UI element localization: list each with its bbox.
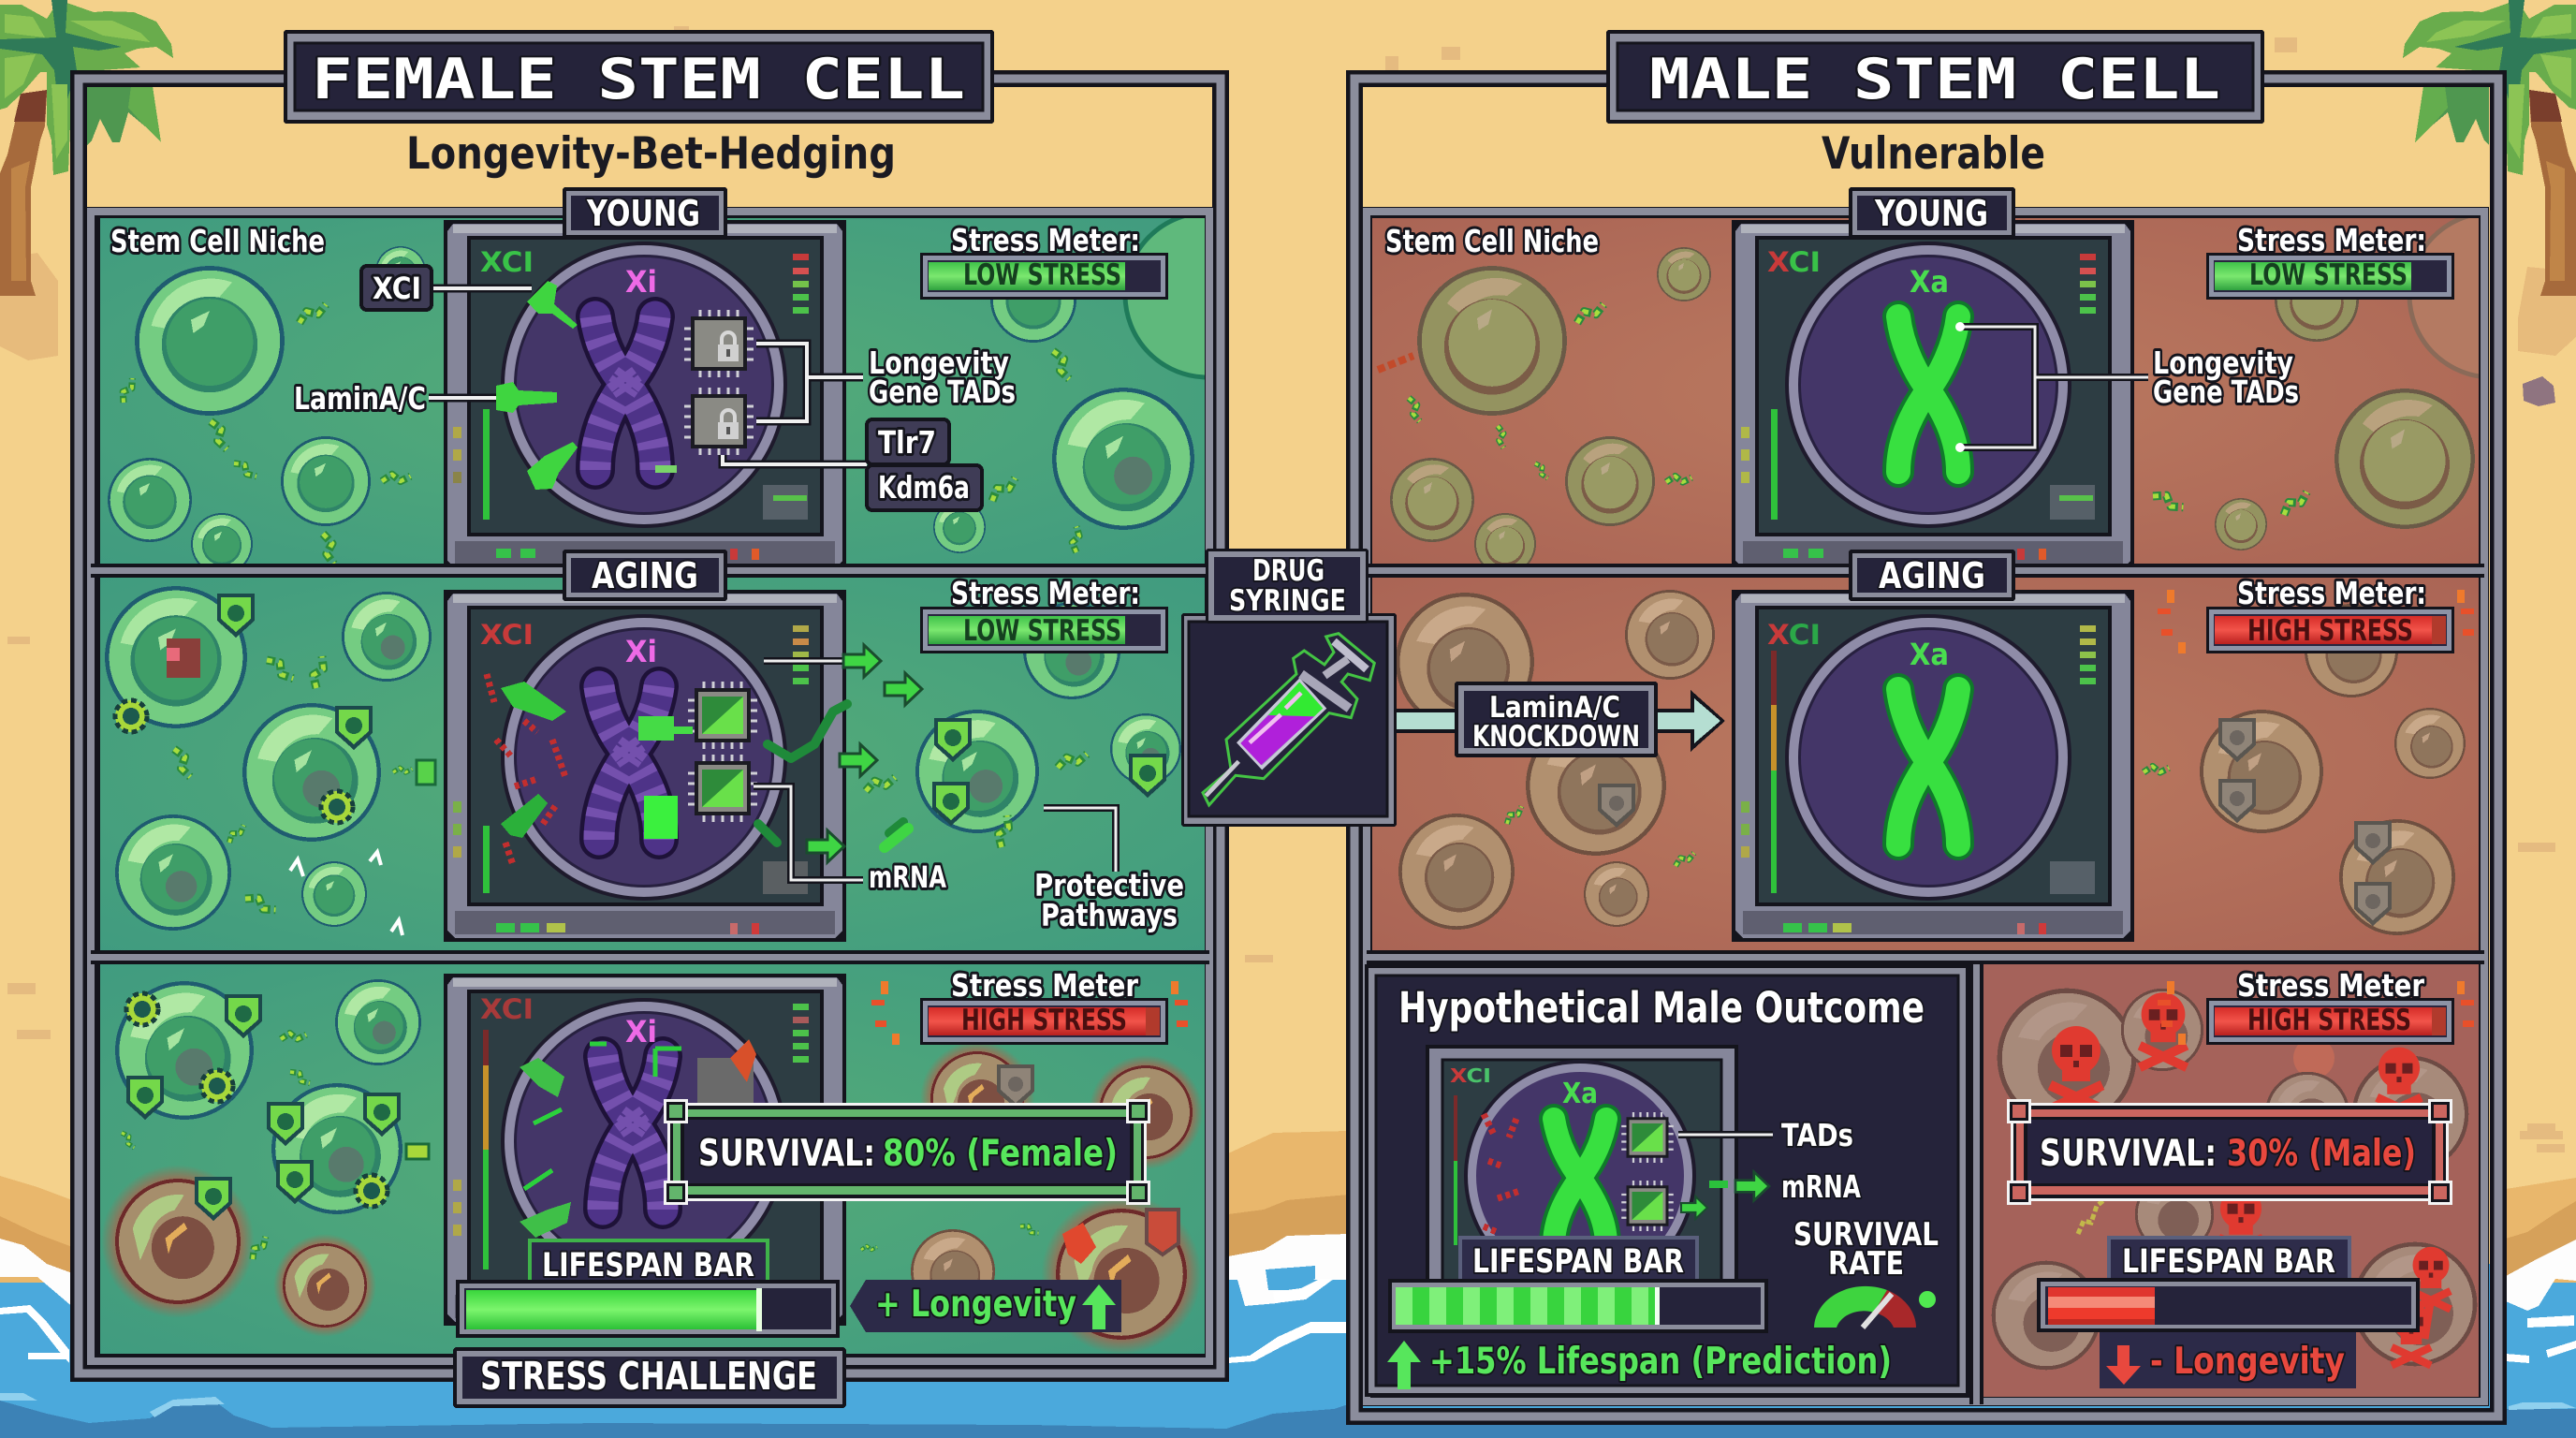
label: young male: YOUNG <box>1874 193 1988 234</box>
XCI screen label: XCI <box>480 246 534 278</box>
Xi label: Xi <box>625 264 657 300</box>
label: aging male <box>1849 550 2015 601</box>
stress meter: female aging low <box>920 575 1168 653</box>
panel: male young niche <box>1378 213 2574 575</box>
icon: syringe <box>1203 634 1374 805</box>
tags: Tlr7 and Kdm6a <box>723 419 982 510</box>
right shore <box>2506 1178 2576 1283</box>
arrow: LaminA/C knockdown from syringe to male panel: LaminA/C <box>1489 691 1620 725</box>
stress meter: male aging high: Stress Meter: <box>2237 575 2426 611</box>
panel: female stress challenge <box>101 979 1203 1354</box>
dying cells <box>1994 990 2475 1368</box>
label: young female <box>563 187 727 239</box>
monitor: female aging <box>444 590 846 942</box>
callout: longevity gene TADs male: Gene TADs <box>2153 374 2299 410</box>
bar: hypothetical lifespan <box>1388 1279 1768 1333</box>
gene chips open <box>688 682 757 749</box>
title: male stem cell: MALE STEM CELL <box>1649 47 2220 112</box>
bar: female lifespan <box>456 1280 840 1338</box>
stress meter: female stress high: HIGH STRESS <box>961 1004 1127 1037</box>
dark panel frame <box>1365 964 1983 1404</box>
panel: male stem cell <box>1354 30 2574 1416</box>
stress meter: female stress high <box>871 967 1188 1045</box>
monitor lights <box>453 254 809 560</box>
title: male stem cell <box>1606 30 2264 124</box>
female outer frame <box>79 79 1221 1373</box>
callout: survival 30% male: 30% (Male) <box>2227 1133 2416 1175</box>
icon: right palm tree <box>2403 0 2576 296</box>
title: female stem cell: FEMALE STEM CELL <box>312 47 965 112</box>
panel: hypothetical male outcome <box>1365 964 1983 1404</box>
green lamin clamps <box>496 281 677 490</box>
subtitle: Vulnerable: Vulnerable <box>1822 128 2045 180</box>
monitor: male young <box>1732 220 2134 572</box>
label: lifespan bar heading male: LIFESPAN BAR <box>2122 1243 2335 1281</box>
green reactivated region <box>638 716 693 839</box>
panel: female young niche <box>108 213 1290 575</box>
label: LaminA/C with pointer: LaminA/C <box>294 380 426 417</box>
middle shore <box>1228 1131 1348 1259</box>
stem cells male young <box>1378 213 2574 575</box>
chromosome: inactive X under stress <box>603 1056 663 1210</box>
label: lifespan bar heading hypothetical: LIFESPAN BAR <box>1472 1243 1684 1281</box>
stress meter: female stress high: Stress Meter <box>951 967 1139 1004</box>
callout: Longevity Gene TADs with bracket: Longevity <box>869 345 1009 381</box>
XCI mini label: XCI <box>1450 1064 1491 1087</box>
gene chips locked <box>684 310 754 377</box>
stress meter: male aging high <box>2158 575 2474 653</box>
aging monitor lights <box>453 625 809 934</box>
callout: longevity gene TADs male <box>1955 322 2299 452</box>
gauge: survival rate <box>1814 1286 1936 1328</box>
callout: Protective Pathways <box>1034 808 1184 933</box>
label: stress challenge <box>453 1347 846 1408</box>
arrow and prediction: +15% lifespan <box>1387 1341 1892 1389</box>
monitor: female stress <box>444 974 846 1326</box>
label: young male <box>1849 187 2015 239</box>
callout: survival 80% female: SURVIVAL: <box>698 1133 875 1175</box>
stress meter: female young low <box>920 222 1168 300</box>
debris mini <box>1454 1095 1520 1245</box>
callout: Protective Pathways: Pathways <box>1041 897 1178 933</box>
stem cells young <box>108 213 1290 575</box>
male inner panel backgrounds <box>1367 212 2484 1401</box>
stem cells aging with shields <box>105 586 1181 935</box>
label: survival rate <box>1793 1216 1939 1283</box>
monitor: female young <box>444 220 846 572</box>
label: survival rate: SURVIVAL <box>1793 1216 1939 1254</box>
chromosome: inactive X aging with escaping regions <box>599 686 659 840</box>
panel: drug syringe <box>1181 549 1397 827</box>
Xi stress label: Xi <box>625 1014 657 1049</box>
label: survival rate: RATE <box>1828 1245 1904 1283</box>
panel: female aging niche <box>105 586 1181 935</box>
heading: Hypothetical Male Outcome: Hypothetical Male Outcome <box>1398 983 1925 1033</box>
stress meter: male young low <box>2206 222 2454 300</box>
label: lifespan bar heading female: LIFESPAN BAR <box>542 1247 754 1284</box>
mini monitor <box>1426 1045 1738 1292</box>
XCI aging label: XCI <box>480 619 534 651</box>
label: young female: YOUNG <box>586 193 700 234</box>
stress meter: male aging high: HIGH STRESS <box>2247 614 2413 648</box>
label: stress challenge: STRESS CHALLENGE <box>480 1354 817 1399</box>
badge: minus longevity <box>2100 1332 2356 1388</box>
arrow and prediction: +15% lifespan: +15% Lifespan (Prediction) <box>1429 1341 1892 1383</box>
panel: male aging niche <box>1396 590 2466 935</box>
damaged lamin and red debris <box>487 674 566 865</box>
chips mini <box>1621 1112 1674 1231</box>
panel: male stress outcome with skulls <box>1994 990 2475 1368</box>
subtitle: Longevity-Bet-Hedging: Longevity-Bet-Hedging <box>406 128 896 180</box>
arrows: mRNA flowing out <box>758 645 922 862</box>
label: aging female <box>563 550 727 601</box>
rescued lamin clamps <box>520 1044 681 1238</box>
XCI male aging label: XCI <box>1767 619 1821 651</box>
arrow: LaminA/C knockdown from syringe to male panel: KNOCKDOWN <box>1472 720 1640 754</box>
Xa mini label: Xa <box>1562 1078 1598 1110</box>
callout: survival 30% male: SURVIVAL: <box>2040 1133 2217 1175</box>
male monitor lights <box>1741 254 2096 560</box>
stem cells male aging <box>1396 590 2466 935</box>
damaged gene chip <box>697 1039 756 1105</box>
stress meter: male stress high <box>2158 967 2474 1045</box>
callout: mRNA <box>754 786 946 895</box>
callout: survival 80% female: 80% (Female) <box>883 1133 1118 1175</box>
label: XCI tag with pointer <box>361 266 532 310</box>
tags: Tlr7 and Kdm6a: Tlr7 <box>878 424 936 461</box>
stress meter: male stress high: Stress Meter <box>2237 967 2425 1004</box>
bar: male lifespan <box>2037 1278 2420 1332</box>
drug syringe box <box>1181 613 1397 827</box>
stress meter: female aging low: LOW STRESS <box>963 614 1121 648</box>
monitor: male aging <box>1732 590 2134 942</box>
callout: mRNA arrow: mRNA <box>1781 1168 1861 1205</box>
stress meter: male young low: Stress Meter: <box>2237 222 2426 258</box>
arrow: LaminA/C knockdown from syringe to male panel <box>1393 682 1725 757</box>
badge: minus longevity: - Longevity <box>2150 1341 2345 1383</box>
label: Stem Cell Niche male: Stem Cell Niche <box>1385 223 1599 259</box>
icon: left palm tree <box>0 0 173 296</box>
dividers male <box>1367 564 2484 964</box>
chromosome: active X aging <box>1898 689 1958 844</box>
chromosome: reactivated male X <box>1554 1119 1606 1245</box>
callout: Protective Pathways: Protective <box>1034 867 1184 903</box>
stress meter: female young low: Stress Meter: <box>951 222 1140 258</box>
male outer frame <box>1354 79 2498 1416</box>
label: aging female: AGING <box>592 555 698 596</box>
stem cells under stress <box>101 979 1203 1354</box>
drug syringe label <box>1206 549 1368 624</box>
sand flecks <box>674 26 689 37</box>
callout: mRNA: mRNA <box>869 859 946 895</box>
panel: female stem cell <box>79 30 1290 1408</box>
callout: survival 80% female <box>664 1099 1150 1205</box>
callout: survival 30% male <box>2007 1099 2452 1205</box>
stress monitor lights <box>453 1004 809 1269</box>
stress meter: male young low: LOW STRESS <box>2249 258 2408 292</box>
stress meter: female aging low: Stress Meter: <box>951 575 1140 611</box>
water base <box>0 1264 2576 1438</box>
female inner panel backgrounds <box>91 212 1209 1361</box>
chromosome: active X young <box>1898 316 1958 472</box>
stress meter: female young low: LOW STRESS <box>963 258 1121 292</box>
callout: longevity gene TADs male: Longevity <box>2153 345 2293 381</box>
left shore <box>0 1176 75 1283</box>
Xa label: Xa <box>1910 264 1949 300</box>
label: XCI tag with pointer: XCI <box>373 271 421 306</box>
badge: plus longevity: + Longevity <box>875 1284 1076 1326</box>
drug syringe label: DRUG <box>1252 554 1325 588</box>
tags: Tlr7 and Kdm6a: Kdm6a <box>878 469 970 506</box>
callout: TADs: TADs <box>1781 1117 1853 1153</box>
callout: mRNA arrow <box>1681 1168 1861 1219</box>
drug syringe label: SYRINGE <box>1229 584 1346 618</box>
XCI stress label: XCI <box>480 993 534 1025</box>
label: aging male: AGING <box>1879 555 1985 596</box>
Xi aging label: Xi <box>625 634 657 669</box>
label: Stem Cell Niche: Stem Cell Niche <box>110 223 325 259</box>
callout: Longevity Gene TADs with bracket <box>756 344 1016 421</box>
male aging monitor lights <box>1741 625 2096 934</box>
Xa aging label: Xa <box>1910 637 1949 672</box>
title: female stem cell <box>284 30 994 124</box>
stress meter: male stress high: HIGH STRESS <box>2247 1004 2411 1037</box>
deep water band <box>0 1401 1348 1438</box>
callout: Longevity Gene TADs with bracket: Gene TADs <box>869 374 1016 410</box>
chromosome: inactive X young <box>595 316 655 470</box>
dividers and row labels female <box>91 564 1209 964</box>
XCI male young label: XCI <box>1767 246 1821 278</box>
